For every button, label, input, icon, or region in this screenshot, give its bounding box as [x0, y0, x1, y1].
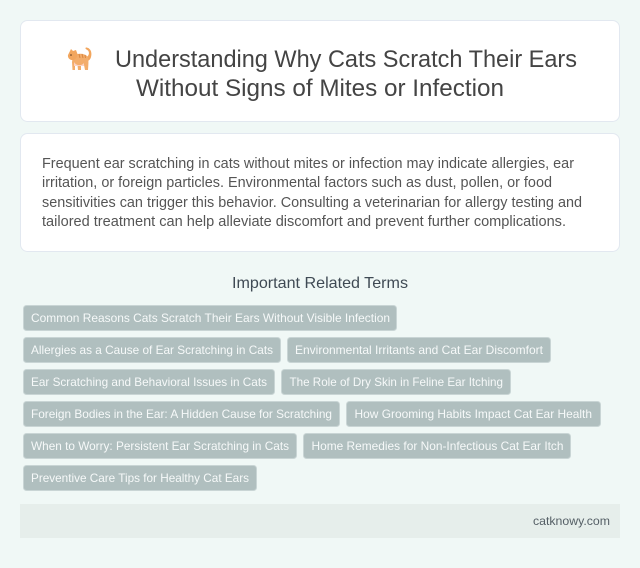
text block: description line 3: sensitivities can trigger this behavior. Consulting a veterinarian for allergy testing and: [42, 194, 582, 211]
tag: home remedies: Home Remedies for Non-Infectious Cat Ear Itch: [312, 439, 564, 453]
tag: when to worry: When to Worry: Persistent Ear Scratching in Cats: [31, 439, 289, 453]
panel: related term tags: [24, 306, 600, 490]
panel: title card: [20, 20, 620, 122]
tag: common reasons: Common Reasons Cats Scratch Their Ears Without Visible Infection: [31, 311, 390, 325]
tag: grooming habits: [346, 402, 600, 426]
tag: allergies: [24, 338, 280, 362]
tag: foreign bodies: [24, 402, 340, 426]
tag: grooming habits: How Grooming Habits Impact Cat Ear Health: [354, 407, 592, 421]
icon: cat: [68, 48, 91, 70]
tag: dry skin: The Role of Dry Skin in Feline Ear Itching: [290, 375, 503, 389]
tag: preventive care: Preventive Care Tips for Healthy Cat Ears: [31, 471, 249, 485]
footer: [20, 504, 620, 538]
heading: related terms: Important Related Terms: [232, 275, 408, 292]
heading: title second line: Without Signs of Mites or Infection: [136, 75, 504, 102]
tag: when to worry: [24, 434, 296, 458]
tag: dry skin: [282, 370, 510, 394]
tag: allergies: Allergies as a Cause of Ear Scratching in Cats: [31, 343, 273, 357]
tag: behavioral issues: Ear Scratching and Behavioral Issues in Cats: [31, 375, 267, 389]
footer: site name: catknowy.com: [533, 514, 610, 528]
tag: preventive care: [24, 466, 256, 490]
panel: description: [20, 134, 620, 252]
tag: environmental irritants: [288, 338, 550, 362]
tag: common reasons: [24, 306, 396, 330]
tag: behavioral issues: [24, 370, 274, 394]
heading: title: Understanding Why Cats Scratch Their Ears: [115, 46, 577, 73]
tag: home remedies: [304, 434, 570, 458]
tag: foreign bodies: Foreign Bodies in the Ear: A Hidden Cause for Scratching: [31, 407, 332, 421]
text block: description line 1: Frequent ear scratching in cats without mites or infection may indicate allergies, ear: [42, 155, 574, 172]
text block: description line 4: tailored treatment can help alleviate discomfort and prevent further complications.: [42, 213, 566, 230]
tag: environmental irritants: Environmental Irritants and Cat Ear Discomfort: [295, 343, 544, 357]
text block: description line 2: irritation, or foreign particles. Environmental factors such as dust, pollen, or food: [42, 174, 552, 191]
